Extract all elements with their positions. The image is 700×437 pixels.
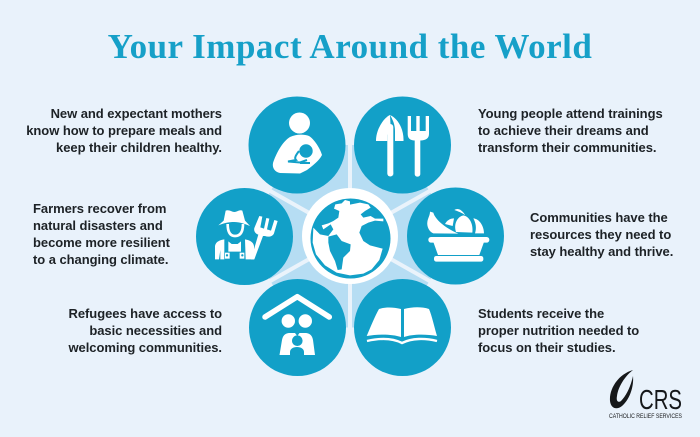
text: refugees: basic necessities and	[89, 323, 222, 338]
logo: CRS: CRS	[639, 384, 682, 415]
text: mothers	[26, 106, 222, 155]
text: farmers: natural disasters and	[33, 218, 163, 233]
icon: farmer with pitchfork	[215, 210, 278, 259]
outer circle fills	[196, 96, 504, 376]
text: farmers	[33, 201, 170, 267]
text: farmers: to a changing climate.	[33, 252, 168, 267]
text: farmers: Farmers recover from	[33, 201, 166, 216]
text: young people	[478, 106, 663, 155]
logo: CRS: CATHOLIC RELIEF SERVICES	[609, 414, 682, 420]
text: refugees: welcoming communities.	[68, 340, 222, 355]
text: refugees	[68, 306, 222, 355]
text: young people: Young people attend trainings	[478, 106, 663, 121]
text: students: proper nutrition needed to	[478, 323, 639, 338]
text: young people: to achieve their dreams and	[478, 123, 649, 138]
white ray dividers	[265, 130, 435, 345]
text: mothers: New and expectant mothers	[51, 106, 222, 121]
text: communities: stay healthy and thrive.	[530, 244, 673, 259]
text: young people: transform their communities.	[478, 140, 656, 155]
text: refugees: Refugees have access to	[68, 306, 222, 321]
text: communities: resources they need to	[530, 227, 671, 242]
text: communities	[530, 210, 673, 259]
icon: shovel and fork	[376, 115, 429, 177]
icon: mother and baby	[273, 112, 322, 174]
icon: house and family	[265, 297, 329, 355]
text: students: Students receive the	[478, 306, 604, 321]
text: students: focus on their studies.	[478, 340, 616, 355]
text: mothers: know how to prepare meals and	[26, 123, 222, 138]
light rays behind circles	[244, 145, 456, 328]
text: mothers: keep their children healthy.	[56, 140, 222, 155]
text: students	[478, 306, 639, 355]
text: communities: Communities have the	[530, 210, 668, 225]
icon: globe	[302, 188, 398, 284]
text: farmers: become more resilient	[33, 235, 170, 250]
icon: fruit bowl	[427, 209, 489, 262]
logo: CRS	[609, 370, 682, 420]
icon: open book	[367, 307, 437, 343]
title: Your Impact Around the World	[108, 27, 592, 66]
